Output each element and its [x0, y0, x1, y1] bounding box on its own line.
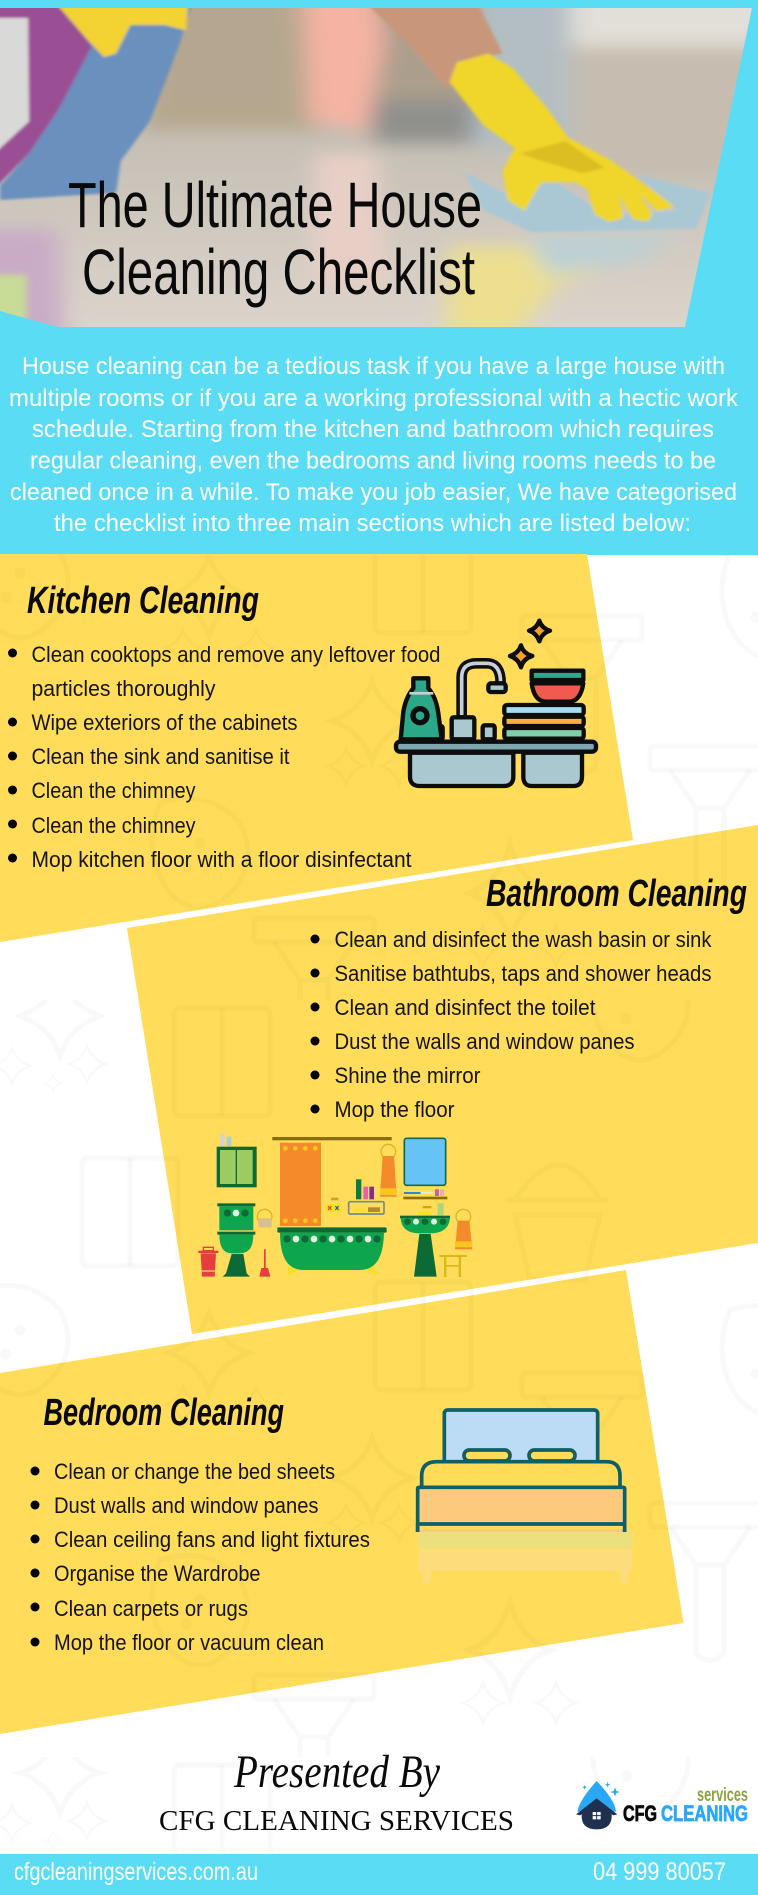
- list: bedroom tasks: [30, 1459, 370, 1655]
- list: bathroom tasks: Sanitise bathtubs, taps and shower heads: [334, 961, 712, 986]
- list: kitchen tasks: Clean the chimney: [32, 778, 196, 803]
- intro paragraph: regular cleaning, even the bedrooms and living rooms needs to be: [30, 448, 716, 474]
- title: [68, 169, 482, 308]
- list: bedroom tasks: Clean ceiling fans and light fixtures: [54, 1527, 370, 1552]
- title: Cleaning Checklist: [82, 236, 475, 308]
- intro paragraph: House cleaning can be a tedious task if you have a large house with: [22, 353, 725, 380]
- intro paragraph: multiple rooms or if you are a working professional with a hectic work: [9, 385, 739, 412]
- list: bedroom tasks: Clean carpets or rugs: [54, 1596, 248, 1621]
- list: bathroom tasks: Clean and disinfect the wash basin or sink: [334, 927, 712, 952]
- footer bar: [0, 1854, 758, 1895]
- intro paragraph: cleaned once in a while. To make you job easier, We have categorised: [10, 479, 737, 506]
- intro paragraph: [9, 353, 739, 537]
- list: bathroom tasks: [310, 927, 712, 1122]
- list: bathroom tasks: Shine the mirror: [334, 1063, 480, 1088]
- title: The Ultimate House: [68, 169, 482, 241]
- list: bedroom tasks: Clean or change the bed sheets: [54, 1459, 335, 1484]
- presented by text: Presented By: [233, 1746, 440, 1798]
- icon: kitchen sink with dishes: [396, 621, 596, 786]
- list: kitchen tasks: Clean the chimney: [32, 813, 196, 838]
- list: kitchen tasks: Mop kitchen floor with a floor disinfectant: [32, 847, 412, 872]
- icon: bed: [418, 1410, 632, 1583]
- logo: CFG Cleaning Services: [576, 1781, 748, 1829]
- panel: bedroom cleaning: [0, 1270, 684, 1734]
- list: bathroom tasks: Clean and disinfect the toilet: [334, 995, 596, 1020]
- heading: kitchen: Kitchen Cleaning: [27, 580, 259, 622]
- panel: header band: [0, 0, 758, 555]
- icon: bathroom scene: [198, 1134, 472, 1277]
- list: kitchen tasks: Clean cooktops and remove any leftover food: [32, 642, 440, 667]
- list: bathroom tasks: Dust the walls and window panes: [334, 1029, 634, 1054]
- panel: kitchen cleaning: [0, 554, 633, 942]
- logo mark: drop and house: [576, 1781, 620, 1829]
- panel: bathroom cleaning: [127, 825, 758, 1334]
- list: bathroom tasks: Mop the floor: [334, 1097, 454, 1122]
- list: bedroom tasks: Organise the Wardrobe: [54, 1561, 260, 1586]
- list: kitchen tasks: Wipe exteriors of the cabinets: [32, 710, 298, 735]
- list: bedroom tasks: Dust walls and window panes: [54, 1493, 318, 1518]
- phone number: 04 999 80057: [593, 1858, 726, 1886]
- intro paragraph: schedule. Starting from the kitchen and bathroom which requires: [32, 416, 714, 443]
- list: kitchen tasks: particles thoroughly: [32, 676, 216, 701]
- logo word: CFG: CFG: [623, 1801, 657, 1826]
- website: cfgcleaningservices.com.au: [14, 1858, 258, 1886]
- list: bedroom tasks: Mop the floor or vacuum clean: [54, 1630, 324, 1655]
- hero photo: gloved hand wiping floor: [0, 0, 758, 343]
- company name: CFG CLEANING SERVICES: [159, 1806, 514, 1837]
- intro paragraph: the checklist into three main sections which are listed below:: [54, 510, 691, 537]
- list: kitchen tasks: Clean the sink and sanitise it: [32, 744, 290, 769]
- list: kitchen tasks: [8, 642, 440, 872]
- heading: bedroom: Bedroom Cleaning: [44, 1392, 284, 1434]
